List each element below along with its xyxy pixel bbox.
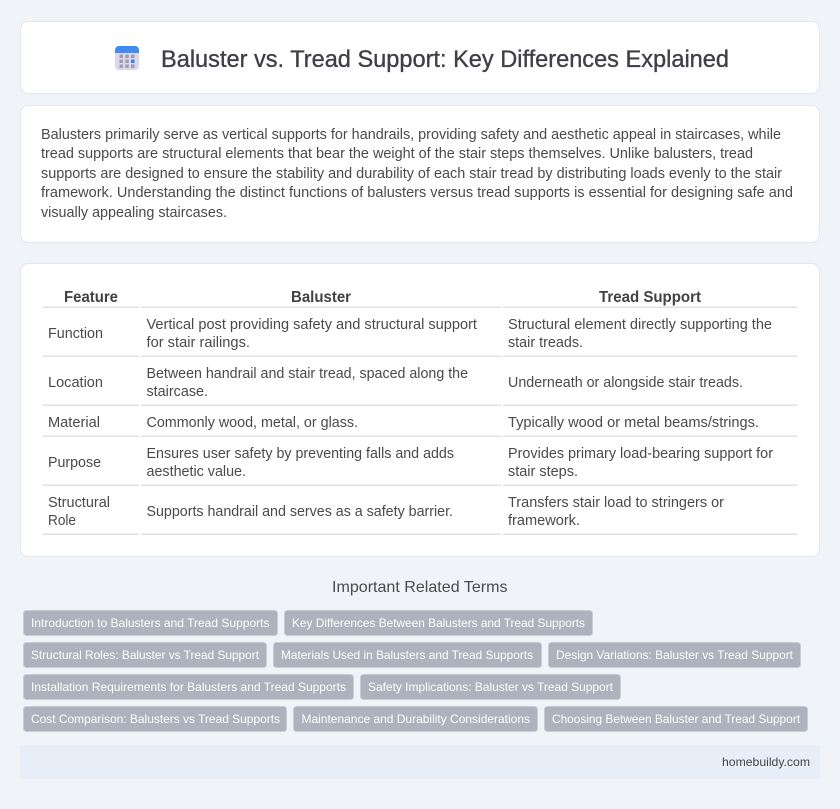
tag [360,674,620,700]
tag: Maintenance and Durability Considerations [302,712,530,726]
heading: important related terms: Important Related Terms [332,579,508,596]
text block: introduction paragraph: visually appealing staircases. [41,205,227,221]
table row: structural role: Role [48,513,76,529]
table row: structural role: Transfers stair load to stringers or [508,495,724,511]
tag [548,642,800,668]
tag: Safety Implications: Baluster vs Tread Support [368,680,614,694]
table row: location: Location [48,375,103,391]
text block: introduction paragraph [41,127,793,221]
tag: Introduction to Balusters and Tread Supports [31,616,270,630]
panel: comparison table [20,264,820,556]
table row: function: Vertical post providing safety and structural support [146,317,477,333]
tag: Cost Comparison: Balusters vs Tread Supports [31,712,280,726]
table row: location [48,366,743,400]
footer source text: homebuildy.com [722,755,810,769]
panel: header [20,22,820,94]
table row: function [48,317,772,351]
table row: structural role: framework. [508,513,580,529]
table row: function: for stair railings. [146,335,250,351]
tag [24,706,286,732]
table row: location: Underneath or alongside stair treads. [508,375,743,391]
tag: Installation Requirements for Balusters and Tread Supports [31,680,346,694]
text block: introduction paragraph: tread supports are structural elements that bear the weight of the stair steps themselves. Unlike balusters, tread [41,146,753,162]
table row: function: Structural element directly supporting the [508,317,772,333]
text block: introduction paragraph: framework. Understanding the distinct functions of balusters versus tread supports is essential for designing safe and [41,185,793,201]
table row: material: Commonly wood, metal, or glass. [146,415,358,431]
tag [24,610,278,636]
tag [294,706,538,732]
text block: introduction paragraph: Balusters primarily serve as vertical supports for handrails, providing safety and aesthetic appeal in staircases, while [41,127,781,143]
table row: structural role [48,495,724,529]
table row: structural role: Supports handrail and serves as a safety barrier. [146,504,453,520]
tag: Choosing Between Baluster and Tread Support [552,712,801,726]
table row: purpose: aesthetic value. [146,464,246,480]
table row: location: Between handrail and stair tread, spaced along the [146,366,468,382]
table row: material: Material [48,415,100,431]
tag: Structural Roles: Baluster vs Tread Support [31,648,260,662]
table row: purpose [48,446,773,480]
tag [24,642,266,668]
table header row [64,289,701,306]
tag: Design Variations: Baluster vs Tread Support [556,648,794,662]
tag: Materials Used in Balusters and Tread Supports [281,648,533,662]
table header row: Feature [64,289,118,306]
tag [284,610,592,636]
table row: function: Function [48,326,103,342]
icon: calendar [115,46,139,70]
footer [20,745,820,779]
tag [544,706,808,732]
panel: introduction [20,106,820,242]
tag [274,642,542,668]
tag [24,674,354,700]
table row: purpose: Ensures user safety by preventing falls and adds [146,446,454,462]
table row: material: Typically wood or metal beams/strings. [508,415,759,431]
table row: purpose: Provides primary load-bearing support for [508,446,773,462]
text block: introduction paragraph: supports are designed to ensure the stability and durability of each stair tread by distributing loads evenly to the stair [41,166,782,182]
table header row: Tread Support [599,289,701,306]
tag list: related terms [24,610,808,732]
table row: purpose: stair steps. [508,464,578,480]
table row: location: staircase. [146,384,208,400]
table row: function: stair treads. [508,335,583,351]
title: Baluster vs. Tread Support: Key Differences Explained [161,46,729,73]
tag: Key Differences Between Balusters and Tread Supports [292,616,585,630]
table row: structural role: Structural [48,495,110,511]
table row: material [48,415,759,431]
table header row: Baluster [291,289,351,306]
table row: purpose: Purpose [48,455,101,471]
